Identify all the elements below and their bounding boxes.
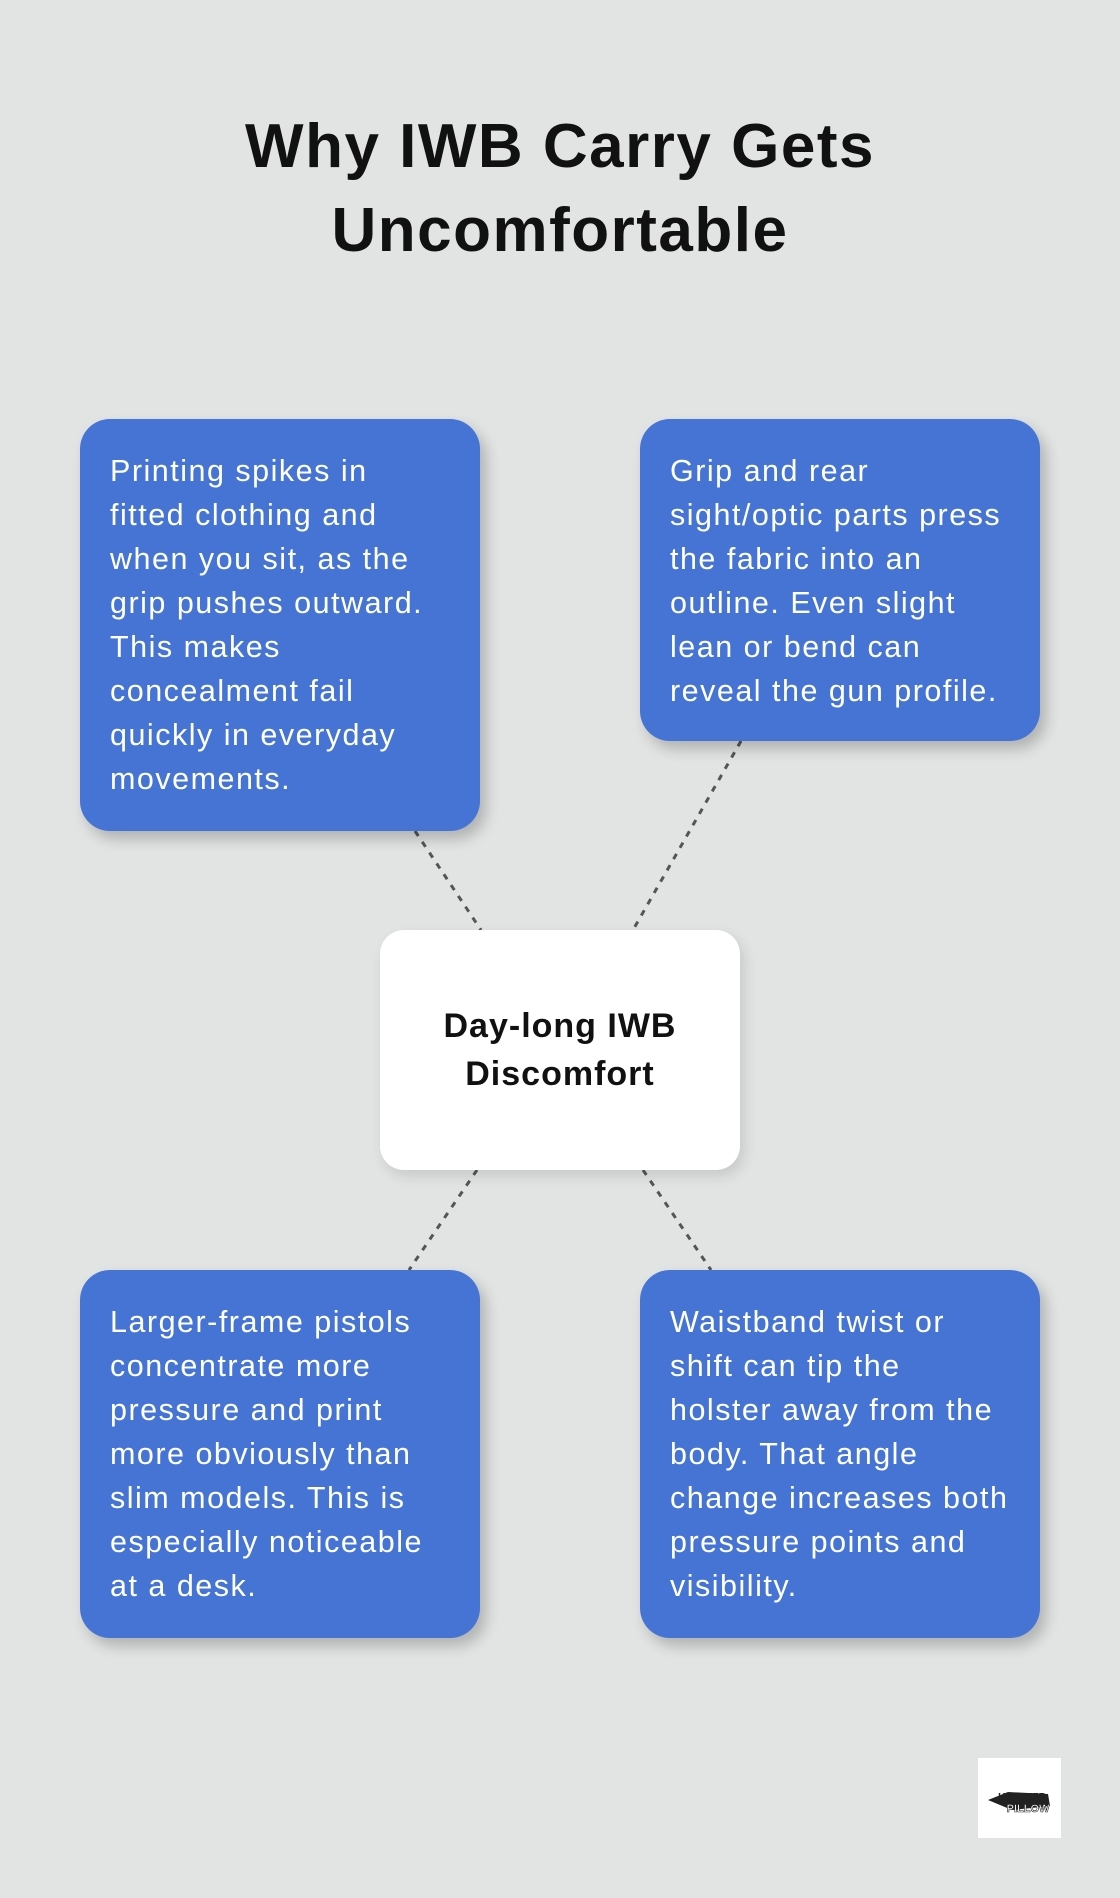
center node: Day-long IWB: [444, 1007, 676, 1045]
panel: bottom-left: especially noticeable: [110, 1525, 423, 1559]
panel: bottom-right: pressure points and: [670, 1525, 966, 1559]
panel: bottom-left: Larger-frame pistols: [110, 1305, 411, 1339]
panel: bottom-right: [640, 1270, 1040, 1638]
center node: Discomfort: [465, 1055, 655, 1093]
panel: top-right: outline. Even slight: [670, 586, 956, 620]
panel: bottom-left: concentrate more: [110, 1349, 371, 1383]
panel: top-left: [80, 419, 480, 831]
panel: top-right: reveal the gun profile.: [670, 674, 998, 708]
panel: bottom-right: shift can tip the: [670, 1349, 901, 1383]
panel: bottom-right: body. That angle: [670, 1437, 918, 1471]
panel: bottom-right: holster away from the: [670, 1393, 993, 1427]
panel: top-left: Printing spikes in: [110, 454, 368, 488]
panel: top-left: grip pushes outward.: [110, 586, 423, 620]
panel: top-left: when you sit, as the: [110, 542, 410, 576]
panel: top-right: lean or bend can: [670, 630, 921, 664]
panel: bottom-left: [80, 1270, 480, 1638]
title: [245, 112, 875, 265]
center node: [380, 930, 740, 1170]
panel: bottom-left: slim models. This is: [110, 1481, 406, 1515]
panel: bottom-left: pressure and print: [110, 1393, 383, 1427]
panel: bottom-right: Waistband twist or: [670, 1305, 945, 1339]
title: Why IWB Carry Gets: [245, 112, 875, 181]
panel: top-right: [640, 419, 1040, 741]
logo: PILLOW: [1007, 1803, 1050, 1815]
title: Uncomfortable: [332, 196, 788, 265]
logo: [978, 1758, 1061, 1838]
panel: top-left: movements.: [110, 762, 291, 796]
panel: bottom-right: visibility.: [670, 1569, 798, 1603]
panel: bottom-left: more obviously than: [110, 1437, 411, 1471]
panel: top-left: This makes: [110, 630, 281, 664]
panel: bottom-right: change increases both: [670, 1481, 1008, 1515]
panel: top-right: sight/optic parts press: [670, 498, 1001, 532]
logo: HOLSTER: [998, 1792, 1047, 1803]
panel: top-right: the fabric into an: [670, 542, 923, 576]
panel: top-left: fitted clothing and: [110, 498, 378, 532]
panel: top-left: concealment fail: [110, 674, 354, 708]
panel: bottom-left: at a desk.: [110, 1569, 257, 1603]
panel: top-right: Grip and rear: [670, 454, 869, 488]
panel: top-left: quickly in everyday: [110, 718, 396, 752]
